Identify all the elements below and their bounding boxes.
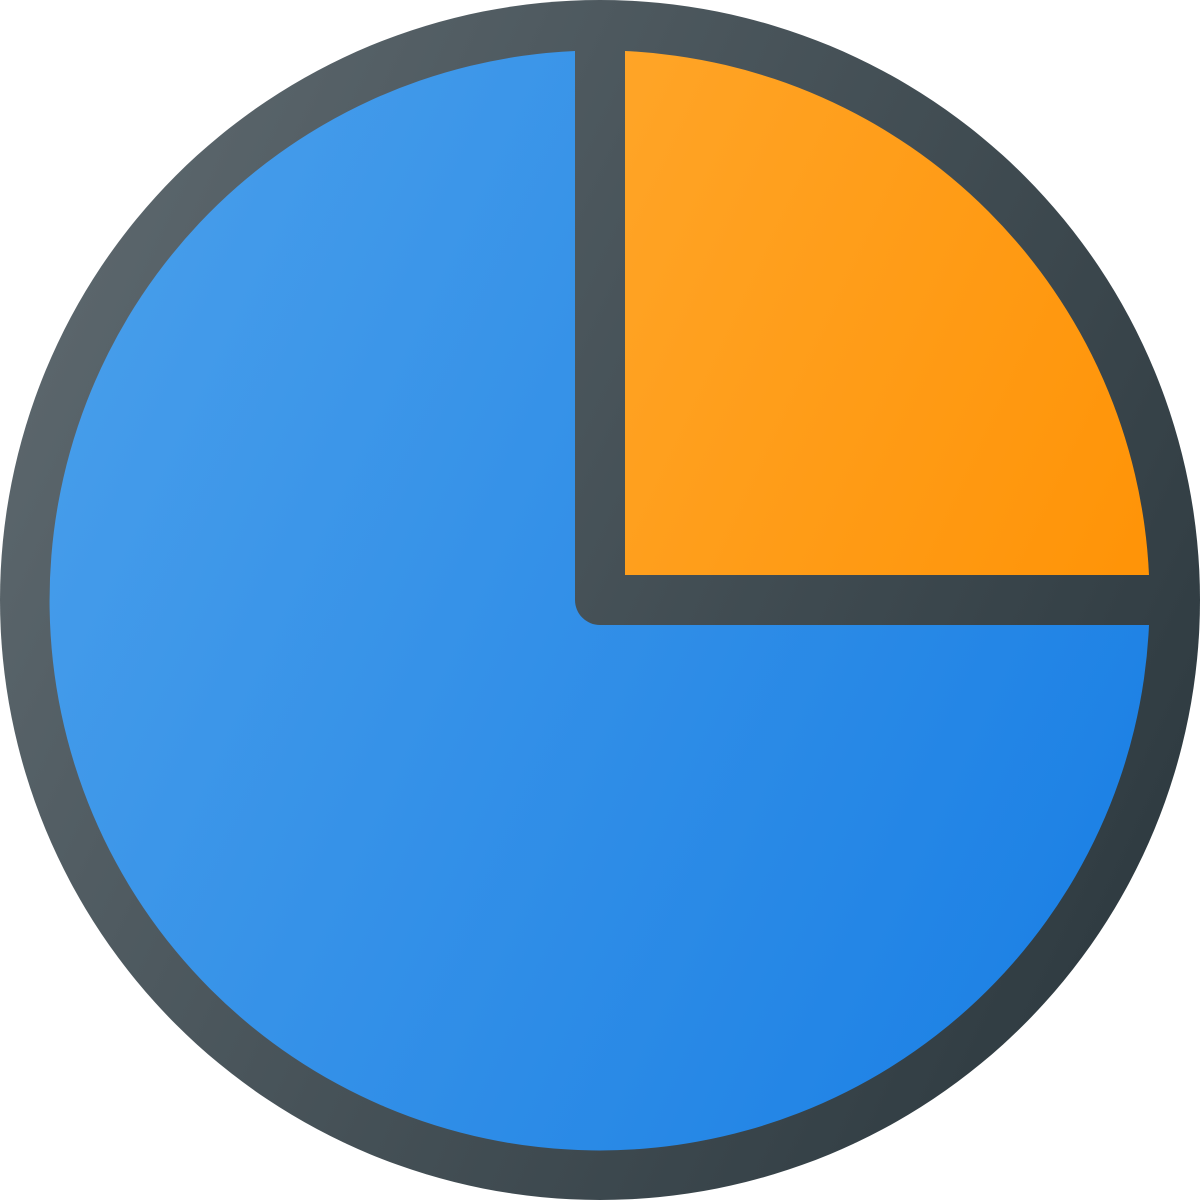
orange slice: one quarter bbox=[625, 51, 1149, 575]
